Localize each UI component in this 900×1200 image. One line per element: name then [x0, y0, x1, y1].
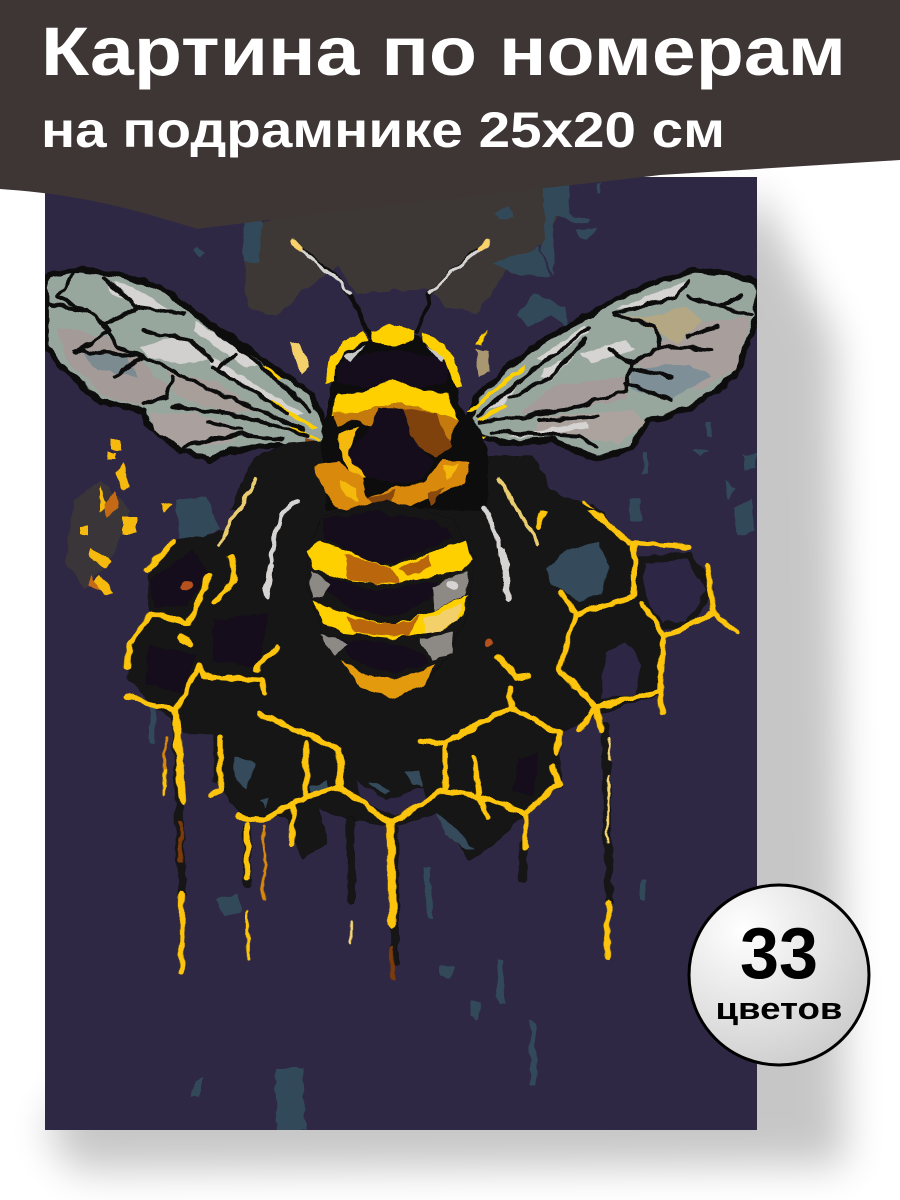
antennae — [293, 242, 488, 337]
wing colour patches — [459, 282, 752, 447]
bee abdomen — [220, 480, 538, 698]
right wing — [459, 271, 758, 459]
header banner — [0, 0, 900, 229]
golden drips — [181, 893, 608, 972]
dark honey drips — [176, 720, 609, 963]
bee body — [230, 323, 597, 510]
canvas drop shadow — [45, 190, 845, 1170]
badge: 33 colours: цветов — [716, 991, 842, 1026]
canvas background — [45, 177, 757, 1130]
bee shoulders — [313, 460, 470, 510]
pollen specks — [80, 440, 172, 595]
wing veins — [476, 282, 752, 447]
dark smudge behind antennae — [194, 183, 757, 475]
wing veins — [47, 273, 310, 447]
honeycomb black mass — [129, 480, 666, 862]
bee thorax — [347, 408, 433, 483]
honeycomb — [125, 480, 736, 978]
abdomen grey fur — [310, 570, 468, 660]
subtitle: на подрамнике 25х20 см — [41, 102, 725, 158]
canvas painting — [46, 183, 758, 1130]
paint splatters and teal specks — [65, 480, 754, 1130]
bee collar — [332, 380, 457, 420]
wing colour patches — [57, 282, 321, 453]
bee legs — [220, 480, 538, 600]
abdomen yellow bands — [306, 540, 472, 585]
badge: 33 colours: 33 — [740, 914, 818, 994]
bee head markings — [290, 323, 490, 388]
title: Картина по номерам — [41, 13, 846, 90]
yellow honeycomb lines — [125, 493, 736, 877]
bee — [220, 242, 597, 698]
honeycomb cell interiors — [146, 542, 710, 850]
left wing — [46, 270, 327, 460]
badge: 33 colours — [689, 885, 869, 1065]
